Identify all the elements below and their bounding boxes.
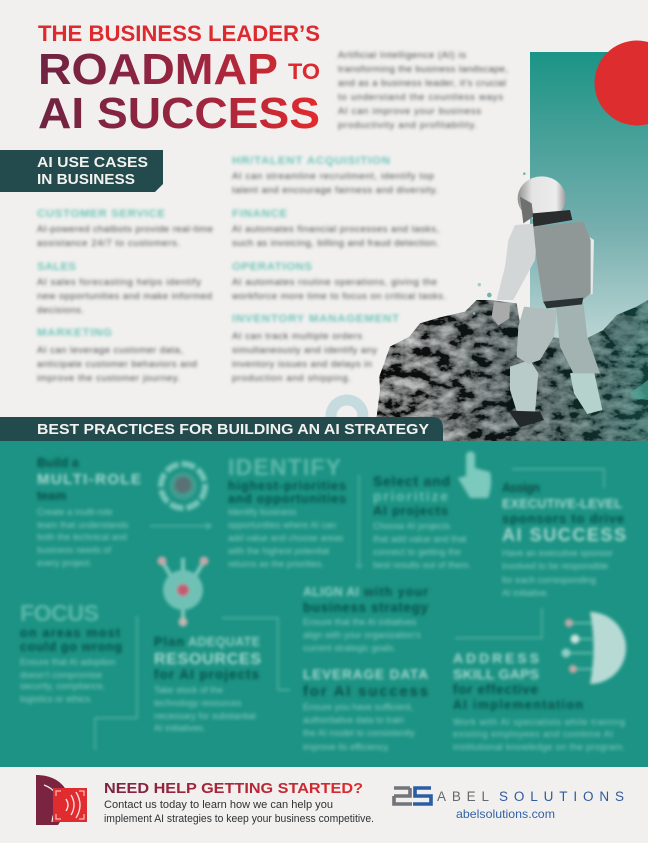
step: align AI: align with your organization’s [303,630,421,640]
title: THE BUSINESS LEADER’S [38,21,320,46]
step: plan resources: AI initiatives. [154,723,206,733]
step: multi-role team: MULTI-ROLE [37,471,141,488]
step: align AI: Ensure that the AI initiatives [303,617,417,627]
step: multi-role team: Build a [37,456,80,470]
step: identify: returns as the priorities. [228,559,324,569]
step: plan resources: Plan [154,635,184,649]
step: multi-role team: team [37,489,66,503]
step: select and prioritize: prioritize [373,488,448,504]
heading: AI use cases [0,150,163,192]
step: select and prioritize: Select and [373,473,450,489]
step: executive sponsors: AI initiative. [502,588,549,598]
step: multi-role team: Create a multi-role [37,507,113,517]
use cases left column: anticipate customer behaviors and [37,359,197,370]
logo: Abel Solutions: SOLUTIONS [499,789,624,804]
step: address skill gaps: institutional knowledge on the program. [453,742,625,752]
use cases left column: assistance 24/7 to customers. [37,238,180,249]
step: focus: FOCUS [20,600,99,626]
use cases right column [231,155,446,384]
intro text: and as a business leader, it’s crucial [338,78,506,89]
decorative ring [331,400,363,432]
use cases left column: MARKETING [37,327,112,339]
step: leverage data: the AI model to consistently [303,728,415,738]
step: leverage data: Ensure you have sufficient, [303,702,413,712]
step: identify: highest-priorities [228,479,346,493]
teal header panel [530,52,648,442]
step: executive sponsors: Have an executive sponsor [502,548,613,558]
intro text [338,50,508,131]
step: select and prioritize: connect to getting the [373,547,461,557]
step: select and prioritize: Choose AI projects [373,521,451,531]
step: identify: with the highest potential [227,546,329,556]
footer text: Contact us today to learn how we can help you [104,799,333,811]
step: address skill gaps: ADDRESS [453,650,539,666]
logo: Abel Solutions: ABEL [437,789,489,804]
heading: AI use cases: IN BUSINESS [37,172,135,188]
step: select and prioritize: best results out of them. [373,560,471,570]
use cases right column: AI can streamline recruitment, identify top [232,171,434,182]
use cases left column [37,208,213,384]
use cases right column: inventory issues and delays in [232,359,372,370]
step: executive sponsors: EXECUTIVE-LEVEL [502,497,622,511]
step: executive sponsors: sponsors to drive [502,511,624,526]
step: focus: security, compliance, [20,681,105,691]
step: multi-role team: every project. [37,558,92,568]
step: multi-role team [37,456,141,568]
section band: BEST PRACTICES FOR BUILDING AN AI STRATEGY [37,421,429,438]
footer [0,767,648,843]
intro text: AI can improve your business [338,106,481,117]
title: ROADMAP [38,45,278,94]
step: select and prioritize: that add value and that [373,534,467,544]
intro text: to understand the countless ways [338,92,503,103]
panel: best practices [0,441,648,767]
use cases right column: simultaneously and identify any [232,345,377,356]
rocks [350,300,648,442]
use cases right column: workforce more time to focus on critical tasks. [231,291,446,302]
footer icon: face with sound [36,775,87,825]
logo: Abel Solutions [394,788,624,821]
step: focus: could go wrong [20,640,122,654]
use cases left column: decisions. [37,305,84,316]
step: select and prioritize [373,473,471,570]
step: address skill gaps: Work with AI specialists while training [453,717,625,727]
use cases right column: such as invoicing, billing and fraud detection. [232,238,439,249]
title: AI SUCCESS [38,89,320,138]
footer heading: NEED HELP GETTING STARTED? [104,780,363,797]
step: address skill gaps [453,650,625,752]
use cases left column: SALES [37,261,76,273]
use cases right column: FINANCE [232,208,287,220]
footer text [104,799,374,825]
step: leverage data: authoritative data to train [303,715,404,725]
use cases right column: OPERATIONS [232,261,312,273]
step: address skill gaps: AI implementation [453,698,583,712]
use cases right column: AI automates financial processes and tasks, [232,224,439,235]
step: plan resources: RESOURCES [154,651,261,668]
step: leverage data: LEVERAGE DATA [303,667,428,682]
use cases right column: AI automates routine operations, giving the [232,277,437,288]
step: executive sponsors: for each corresponding [502,575,596,585]
title: TO [288,59,320,84]
step: align AI: with your [363,585,428,599]
title [38,21,320,138]
step: plan resources: for AI projects [154,667,259,682]
use cases right column: talent and encourage fairness and diversity. [232,185,438,196]
icon: half circle skills [562,612,626,684]
use cases left column: new opportunities and make informed [37,291,212,302]
step: select and prioritize: AI projects [373,503,448,518]
use cases right column: HR/TALENT ACQUISITION [232,155,390,167]
use cases right column: AI can track multiple orders [232,331,362,342]
use cases right column: INVENTORY MANAGEMENT [232,313,399,325]
step: executive sponsors: involved to be responsible [502,561,608,571]
step: executive sponsors: AI SUCCESS [502,525,626,545]
step: align AI [303,585,428,653]
step: executive sponsors [502,481,626,598]
step: identify: IDENTIFY [228,454,341,480]
step: identify: and opportunities [228,492,346,506]
step: plan resources [154,635,261,733]
intro text: productivity and profitability. [338,120,477,131]
step: focus: on areas most [20,626,121,640]
intro text: Artificial Intelligence (AI) is [338,50,466,61]
step: plan resources: ADEQUATE [188,635,260,649]
step: multi-role team: team that understands [37,520,129,530]
use cases left column: improve the customer journey. [37,373,180,384]
use cases left column: AI sales forecasting helps identify [37,277,201,288]
connectors [95,469,604,750]
step: align AI: ALIGN AI [303,585,359,599]
step: address skill gaps: existing employees and combine AI [453,729,613,739]
step: align AI: business strategy [303,600,428,615]
step: leverage data: for AI success [303,683,428,700]
step: align AI: current strategic goals. [303,643,396,653]
icon: team circle [161,464,205,508]
use cases right column: production and shipping. [232,373,351,384]
icon: pointing hand [458,452,491,498]
step: executive sponsors: Assign [502,481,540,495]
step: address skill gaps: for effective [453,682,538,697]
step: identify [227,454,346,569]
step: leverage data [303,667,428,752]
use cases left column: AI-powered chatbots provide real-time [37,224,213,235]
step: identify: Identify business [228,507,297,517]
step: focus: doesn’t compromise [20,670,102,680]
heading: AI use cases: AI USE CASES [37,155,148,171]
step: focus: Ensure that AI adoption [20,657,116,667]
step: plan resources: necessary for substantial [154,711,256,721]
use cases left column: AI can leverage customer data, [37,345,183,356]
use cases left column: CUSTOMER SERVICE [37,208,165,220]
step: multi-role team: business needs of [37,545,112,555]
step: multi-role team: both the technical and [37,532,127,542]
step: plan resources: Take stock of the [154,685,223,695]
step: leverage data: improve its efficiency. [303,742,390,752]
step: identify: opportunities where AI can [228,520,336,530]
astronaut [492,176,602,427]
footer text: implement AI strategies to keep your business competitive. [104,813,374,825]
sparkles [473,172,526,315]
step: address skill gaps: SKILL GAPS [453,666,539,682]
icon: branching nodes [158,556,208,626]
step: focus [20,600,122,704]
illustration: astronaut on rocks [350,172,648,442]
step: plan resources: technology resources [154,698,242,708]
step: identify: add value and choose areas [228,533,344,543]
step: focus: logistics or ethics. [20,694,93,704]
intro text: transforming the business landscape, [338,64,508,75]
logo: Abel Solutions: abelsolutions.com [456,807,555,821]
red circle [594,40,648,126]
section band [0,417,443,441]
